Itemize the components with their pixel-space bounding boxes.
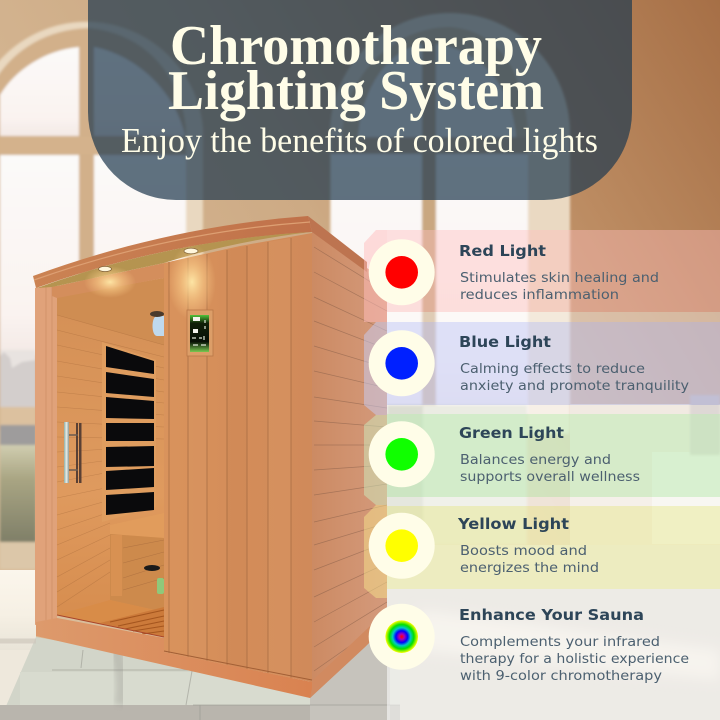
item: enhance your sauna	[369, 604, 689, 684]
item: yellow light	[369, 513, 599, 579]
blue light text	[459, 333, 689, 394]
subtitle: Enjoy the benefits of colored lights	[121, 121, 598, 160]
infrared panels	[102, 342, 156, 522]
enhance text: Complements your infrared	[460, 635, 660, 650]
green light text: Green Light	[459, 424, 565, 442]
enhance text: therapy for a holistic experience	[460, 652, 689, 667]
sauna cabin	[33, 216, 387, 698]
red light text	[459, 242, 659, 303]
blue light text: Blue Light	[459, 333, 552, 351]
enhance text	[459, 606, 689, 684]
left city haze	[0, 350, 36, 407]
floor slats	[57, 600, 164, 637]
yellow light text: Yellow Light	[457, 515, 570, 533]
title: Chromotherapy	[170, 15, 542, 77]
roof	[33, 216, 312, 288]
left arched window	[0, 22, 203, 569]
header banner	[88, 0, 632, 200]
yellow light text: energizes the mind	[460, 561, 599, 576]
icon: blue dot	[369, 330, 435, 396]
green light text	[459, 424, 640, 485]
sauna base	[36, 618, 312, 698]
blue light text: Calming effects to reduce	[460, 362, 645, 377]
right furniture	[570, 404, 720, 549]
icon: yellow dot	[369, 513, 435, 579]
ceiling lights	[84, 244, 216, 320]
title	[168, 15, 544, 122]
green light text: supports overall wellness	[460, 470, 640, 485]
control panel	[187, 310, 213, 356]
item: blue light	[369, 330, 689, 396]
icon: green dot	[369, 421, 435, 487]
item: green light	[369, 421, 640, 487]
red light text: reduces inflammation	[460, 288, 619, 303]
centre arched window	[330, 13, 570, 545]
sauna front door panel	[164, 233, 312, 682]
item: red light	[369, 239, 659, 305]
sauna right side wall	[308, 216, 387, 698]
enhance text: Enhance Your Sauna	[459, 606, 644, 624]
door handle	[64, 422, 82, 483]
red light text: Stimulates skin healing and	[460, 271, 659, 286]
floor	[0, 570, 36, 650]
green light text: Balances energy and	[460, 453, 611, 468]
red light text: Red Light	[459, 242, 547, 260]
sauna left post	[35, 284, 57, 625]
sauna interior	[57, 278, 164, 637]
bench and lower cavity	[110, 513, 164, 612]
benefit colour bands	[364, 230, 720, 720]
yellow light text	[457, 515, 599, 576]
yellow light text: Boosts mood and	[460, 544, 587, 559]
blue light text: anxiety and promote tranquility	[460, 379, 689, 394]
sauna header above door	[52, 263, 164, 298]
icon: rainbow dot	[369, 604, 435, 670]
interior sphere light	[152, 316, 164, 336]
enhance text: with 9-color chromotherapy	[460, 669, 662, 684]
icon: red dot	[369, 239, 435, 305]
title: Lighting System	[168, 60, 544, 122]
